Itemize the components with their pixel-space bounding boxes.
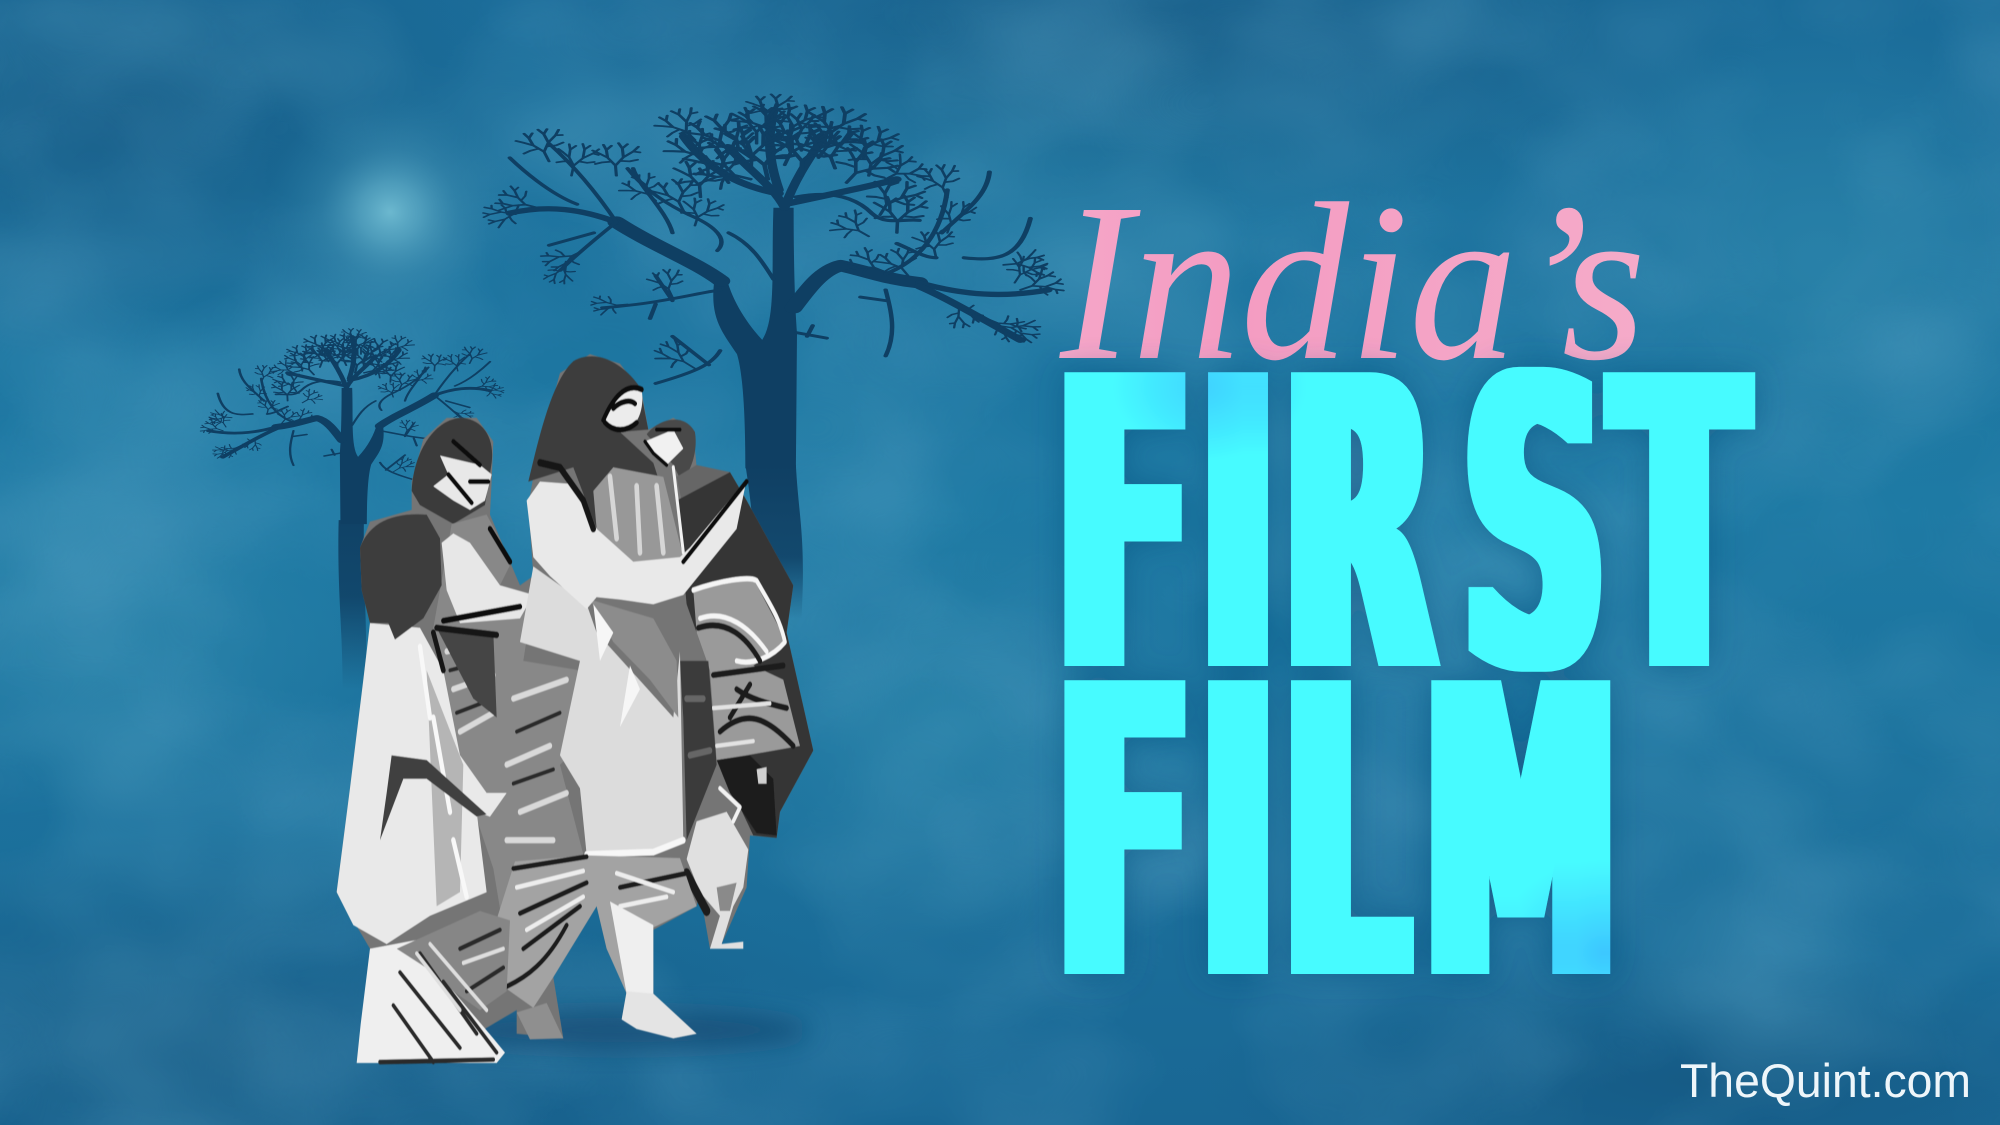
- figure: central woman: [493, 356, 747, 1039]
- figure: right figure in dark cloak: [677, 472, 813, 949]
- tree: small: [198, 328, 505, 690]
- figure: rear child behind the woman: [647, 420, 730, 500]
- moon glow: [265, 94, 515, 330]
- tree: large: [481, 94, 1067, 618]
- trees: [198, 94, 1067, 690]
- heading line: FIRST: FIRST: [1059, 293, 1745, 762]
- watermark: TheQuint.com: TheQuint.com: [1680, 1054, 1971, 1107]
- figure: second child: [412, 418, 583, 949]
- figures silhouette: [337, 354, 813, 1063]
- figure: front child: [337, 514, 510, 1063]
- ground shadow: [430, 1010, 810, 1050]
- figures: women and children walking: [337, 354, 813, 1063]
- heading: FIRST FILM: [1059, 293, 1745, 1070]
- heading: India's: India’s: [1059, 157, 1646, 407]
- heading line: FILM: FILM: [1059, 601, 1616, 1070]
